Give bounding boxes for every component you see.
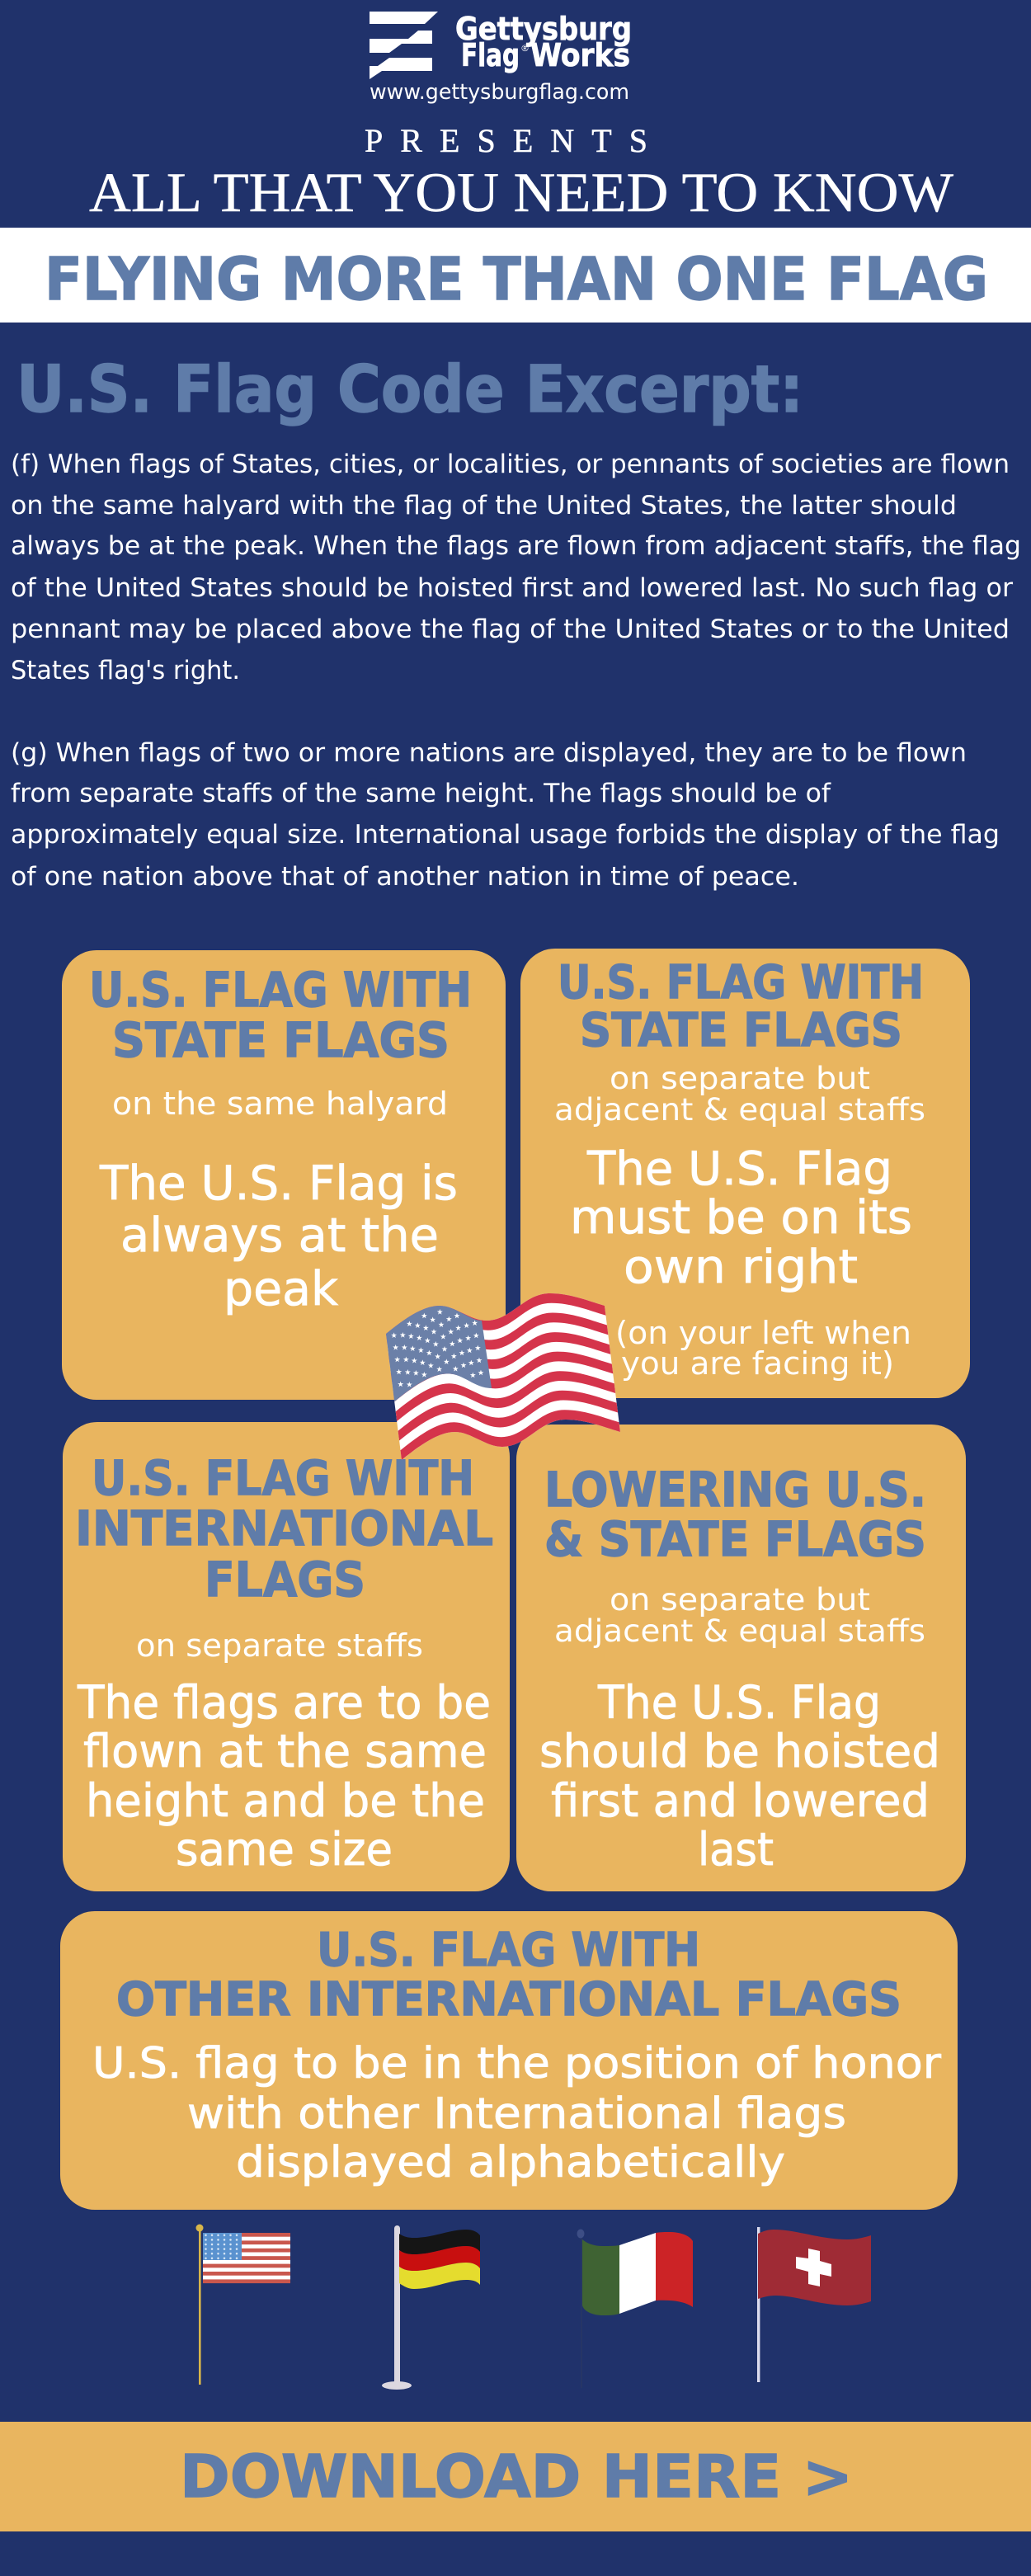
text block: paragraph f: of the United States should be hoisted first and lowered last. No such flag or	[11, 573, 1013, 603]
text block: paragraph f: States flag's right.	[11, 656, 240, 685]
panel heading: & STATE FLAGS	[544, 1511, 926, 1567]
panel rule text: with other International flags	[187, 2089, 846, 2139]
text block: paragraph g: of one nation above that of another nation in time of peace.	[11, 862, 799, 892]
panel note	[615, 1315, 911, 1382]
icon: waving American flag	[386, 1293, 620, 1460]
panel subheading: adjacent & equal staffs	[554, 1092, 925, 1128]
panel subheading: on separate but	[610, 1582, 870, 1618]
panel heading: INTERNATIONAL	[75, 1500, 493, 1556]
panel heading: LOWERING U.S.	[544, 1462, 926, 1518]
website url: www.gettysburgflag.com	[370, 80, 629, 105]
panel subheading	[554, 1061, 925, 1128]
panel rule text	[99, 1156, 458, 1316]
panel subheading: on the same halyard	[112, 1085, 448, 1122]
panel: lowering flags	[516, 1425, 966, 1891]
panel rule text: peak	[224, 1262, 338, 1316]
panel subheading: on separate but	[610, 1061, 870, 1096]
icon: Italian flag on pole	[577, 2229, 693, 2388]
logo	[370, 11, 632, 105]
panel rule text: The U.S. Flag	[586, 1142, 892, 1196]
logo wordmark: ®	[520, 43, 530, 54]
logo wordmark: Works	[530, 37, 630, 73]
text block: paragraph f	[11, 450, 1021, 685]
logo wordmark: Flag	[461, 37, 520, 73]
panel heading: STATE FLAGS	[112, 1012, 450, 1068]
panel: state flags on same halyard	[62, 950, 506, 1400]
panel rule text	[539, 1676, 940, 1876]
panel rule text: The U.S. Flag is	[99, 1156, 458, 1211]
panel rule text: first and lowered	[551, 1774, 930, 1827]
panel heading: U.S. FLAG WITH	[317, 1924, 700, 1977]
section heading: U.S. Flag Code Excerpt:	[16, 353, 803, 427]
panel heading	[89, 962, 472, 1068]
panel heading	[116, 1924, 902, 2027]
panel rule text: displayed alphabetically	[236, 2138, 785, 2187]
panel: international flags	[63, 1422, 510, 1891]
logo wordmark	[455, 11, 632, 73]
panel subheading	[554, 1582, 925, 1649]
icon: small American flag on pole	[196, 2224, 290, 2385]
panel note: (on your left when	[615, 1315, 911, 1351]
panel rule text: should be hoisted	[539, 1725, 940, 1778]
panel rule text: always at the	[120, 1208, 439, 1263]
icon: Swiss flag on pole	[757, 2227, 871, 2382]
panel rule text: same size	[176, 1823, 393, 1876]
presents label: PRESENTS	[365, 122, 647, 159]
panel rule text: height and be the	[86, 1774, 485, 1827]
panel subheading: on separate staffs	[136, 1627, 423, 1664]
text block: paragraph g: approximately equal size. International usage forbids the display of the flag	[11, 820, 1000, 850]
panel rule text	[570, 1142, 912, 1294]
text block: paragraph g	[11, 738, 1000, 892]
title band	[0, 228, 1031, 323]
text block: paragraph f: always be at the peak. When the flags are flown from adjacent staffs, the flag	[11, 531, 1021, 561]
panel rule text: must be on its	[570, 1191, 912, 1245]
main heading: FLYING MORE THAN ONE FLAG	[45, 245, 988, 313]
panel heading: U.S. FLAG WITH	[92, 1450, 474, 1506]
logo wordmark: Gettysburg	[455, 11, 632, 47]
panel rule text: The flags are to be	[77, 1676, 491, 1729]
panel: other international flags	[60, 1911, 958, 2210]
panel rule text	[77, 1676, 491, 1876]
panel rule text: U.S. flag to be in the position of honor	[92, 2039, 942, 2089]
title line: ALL THAT YOU NEED TO KNOW	[89, 161, 954, 224]
text block: paragraph f: pennant may be placed above the flag of the United States or to the United	[11, 615, 1010, 644]
panel subheading: adjacent & equal staffs	[554, 1613, 925, 1649]
download call to action: DOWNLOAD HERE >	[180, 2442, 853, 2511]
panel heading: OTHER INTERNATIONAL FLAGS	[116, 1973, 902, 2027]
panel heading: STATE FLAGS	[580, 1004, 902, 1057]
panel note: you are facing it)	[621, 1345, 894, 1382]
panel: state flags on adjacent staffs	[520, 949, 970, 1398]
panel rule text: flown at the same	[83, 1725, 487, 1778]
panel rule text: own right	[624, 1241, 858, 1294]
panel rule text: The U.S. Flag	[597, 1676, 881, 1729]
panel heading	[544, 1462, 926, 1567]
panel heading: FLAGS	[205, 1552, 365, 1608]
panel rule text	[92, 2039, 942, 2187]
text block: paragraph f: (f) When flags of States, cities, or localities, or pennants of societies are flown	[11, 450, 1010, 479]
download band	[0, 2422, 1031, 2531]
text block: paragraph g: (g) When flags of two or more nations are displayed, they are to be flown	[11, 738, 967, 768]
panel heading	[75, 1450, 493, 1608]
icon: German flag on pole	[382, 2225, 480, 2390]
panel heading: U.S. FLAG WITH	[89, 962, 472, 1018]
text block: paragraph f: on the same halyard with the flag of the United States, the latter should	[11, 491, 957, 520]
text block: paragraph g: from separate staffs of the same height. The flags should be of	[11, 779, 831, 808]
panel heading	[558, 956, 924, 1057]
panel rule text: last	[698, 1823, 774, 1876]
icon: flag mark	[370, 12, 438, 79]
panel heading: U.S. FLAG WITH	[558, 956, 924, 1010]
